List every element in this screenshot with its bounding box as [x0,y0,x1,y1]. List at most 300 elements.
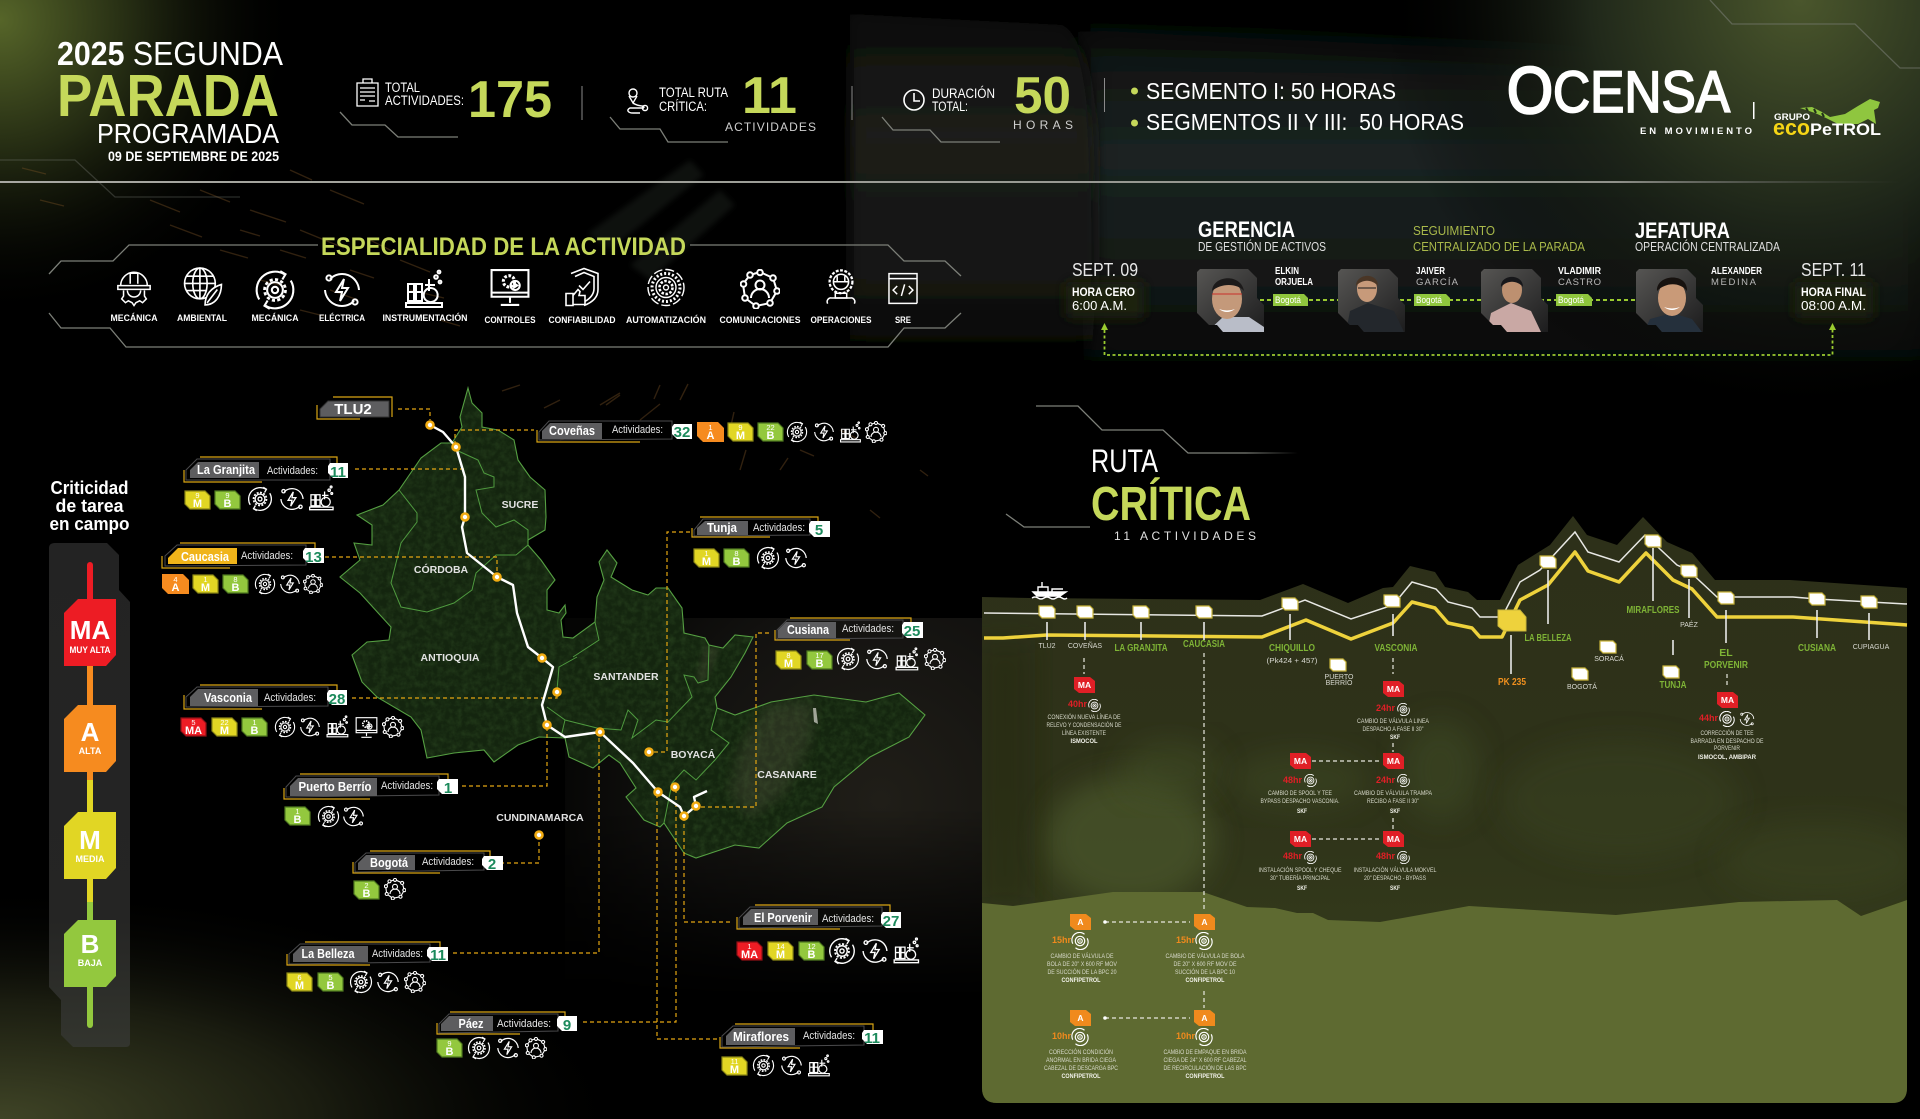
label: El Porvenir: 27 [883,913,899,930]
icon: sre: SRE [895,315,911,325]
pipeline nodes [426,422,700,838]
activity: conexion nueva linea [1046,677,1122,745]
label: La Belleza: B [327,980,335,992]
activity: instalacion spool y cheque [1258,831,1342,892]
icon: mecanica gear [252,271,299,323]
label: Miraflores: Actividades: [803,1030,855,1042]
activity: correccion de tee: BARRADA EN DESPACHO DE [1690,738,1764,745]
activity: instalacion valvula mokvel: INSTALACIÓN VÁLVULA MOKVEL [1354,865,1437,874]
activity: cambio de valvula de bola bpc 10: 15hr [1176,935,1196,945]
activity: instalacion spool y cheque: SKF [1297,885,1307,892]
activity: conexion nueva linea: LÍNEA EXISTENTE [1062,728,1107,737]
label: Cusiana [775,618,946,670]
logo: grupo ecopetrol [1773,99,1881,140]
level: baja: BAJA [78,958,103,968]
title: PARADA [57,63,279,129]
pipeline route [430,425,707,816]
stat: total actividades: ACTIVIDADES: [385,93,464,108]
label: La Belleza: 5 [328,973,333,982]
timeline start: sept 09: SEPT. 09 [1072,260,1138,280]
activity: cambio de valvula de bola bpc 10 [1166,914,1245,984]
label: La Belleza [287,942,448,993]
activity: cambio de empaque en brida: CONFIPETROL [1186,1073,1225,1080]
label: Miraflores: Miraflores [733,1029,789,1044]
label: Bogotá: 2 [364,881,369,890]
label: La Granjita: M [193,498,202,510]
level: media: MEDIA [76,854,105,864]
heading: ruta critica [1006,406,1298,543]
icon: ambiental: AMBIENTAL [177,313,227,323]
timeline end: sept 11: SEPT. 11 [1801,260,1866,280]
label: Miraflores: 11 [864,1030,880,1047]
heading: gerencia [1198,217,1326,254]
heading: ruta critica: CRÍTICA [1091,477,1251,531]
label: Puerto Berrío: B [294,814,302,826]
name: vladimir castro [1558,266,1602,288]
activity: cambio de empaque en brida: 10hr [1176,1031,1196,1041]
icon: automatizacion: AUTOMATIZACIÓN [626,314,706,325]
activity: cambio de valvula de bola bpc 20: CONFIPETROL [1062,977,1101,984]
icon: comunicaciones [720,270,800,325]
activity: cambio de spool y tee: SKF [1297,808,1307,815]
activity: correccion condicion anormal: CORECCIÓN CONDICIÓN [1049,1047,1113,1056]
icon: mecanica helmet [110,272,158,323]
level: media [64,812,116,879]
activity: correccion condicion anormal: ANORMAL EN BRIDA CIEGA [1046,1057,1117,1064]
stat: duracion total [882,67,1105,142]
activity: cambio de valvula de bola bpc 20: A [1077,917,1084,927]
activity: instalacion spool y cheque: 48hr [1283,851,1303,861]
activity: cambio de valvula linea [1357,681,1430,741]
stat: total ruta critica: TOTAL RUTA [659,85,728,100]
label: Cusiana: 25 [904,623,920,640]
arrow: dashed timeline loop [1101,323,1836,355]
activity: correccion de tee: PORVENIR [1714,745,1740,752]
label: Bogotá [353,851,503,900]
label: Tunja: 5 [815,522,823,539]
title [57,35,283,164]
label: Caucasia: 4 [173,575,178,584]
name: vladimir castro: VLADIMIR [1558,266,1602,277]
map labels: CUNDINAMARCA [496,812,584,824]
label: El Porvenir: 1 [747,942,752,951]
activity: instalacion spool y cheque: INSTALACIÓN SPOOL Y CHEQUE [1258,865,1342,874]
label: Vasconia: 28 [329,691,345,708]
activity: cambio de valvula linea: 24hr [1376,703,1396,713]
heading: criticidad [50,478,130,534]
station labels: PUERTO [1325,674,1354,681]
label: Tunja [692,517,830,569]
heading: gerencia: GERENCIA [1198,217,1295,242]
stat: duracion total: TOTAL: [932,99,968,114]
name: jaiver garcia: GARCÍA [1416,277,1459,288]
label: Puerto Berrío: Puerto Berrío [298,779,372,794]
photo: vladimir castro [1481,269,1549,332]
heading: criticidad: de tarea [56,496,124,516]
level: muy alta [64,599,116,666]
map labels: SANTANDER [593,671,659,683]
logo: grupo ecopetrol: PeTROL [1810,120,1881,139]
yellow pipeline line [984,552,1907,639]
label: Coveñas: B [767,430,775,442]
label: Caucasia: 1 [203,575,208,584]
activity: correccion condicion anormal: 10hr [1052,1031,1072,1041]
heading: gerencia: DE GESTIÓN DE ACTIVOS [1198,239,1326,254]
activity: cambio de valvula de bola bpc 20: 15hr [1052,935,1072,945]
label: La Granjita: La Granjita [197,462,256,477]
activity: correccion de tee: 44hr [1699,713,1719,723]
label: Coveñas [537,421,887,443]
activity: cambio de valvula de bola bpc 10: CONFIPETROL [1186,977,1225,984]
timeline end: sept 11: 08:00 A.M. [1801,299,1866,313]
station labels: VASCONIA [1374,642,1418,654]
icon: electrica [319,274,365,323]
activity: instalacion spool y cheque: 30" TUBERÍA PRINCIPAL [1270,873,1330,882]
station labels: CUPIAGUA [1853,644,1890,651]
label: El Porvenir [737,905,918,964]
tag: bogota 2: Bogotá [1416,295,1443,306]
icon: instrumentacion [382,271,468,323]
label: Vasconia: 1 [252,718,257,727]
map labels [414,499,817,824]
activity: cambio de spool y tee: CAMBIO DE SPOOL Y TEE [1268,790,1333,797]
level: muy alta: MUY ALTA [70,645,111,655]
label: Caucasia: Caucasia [181,549,230,564]
label: El Porvenir: MA [741,949,758,961]
activity: cambio de valvula linea: CAMBIO DE VÁLVULA LINEA [1357,716,1430,725]
stat: duracion total: 50 [1014,67,1071,125]
label: Coveñas: 9 [738,423,743,432]
station labels: PK 235 [1498,676,1526,688]
activity: cambio de empaque en brida: DE RECIRCULACIÓN DE LAS BPC [1164,1063,1247,1072]
icon: confiabilidad: CONFIABILIDAD [548,315,616,325]
label: Caucasia: 8 [233,575,238,584]
station labels: COVEÑAS [1068,641,1102,650]
label: Miraflores: 11 [731,1057,738,1066]
title: 09 DE SEPTIEMBRE DE 2025 [108,148,279,164]
terrain upper [975,516,1920,1103]
legend: criticidad de tarea en campo [49,478,130,1047]
map labels: CÓRDOBA [414,563,469,576]
activity: cambio de valvula de bola bpc 10: SUCCIÓN DE LA BPC 10 [1175,967,1235,976]
label: Vasconia: Actividades: [264,692,316,704]
station labels: PORVENIR [1704,659,1748,671]
station labels: TLU2 [1038,643,1056,650]
heading: seguimiento: CENTRALIZADO DE LA PARADA [1413,239,1585,254]
station labels: CUSIANA [1798,642,1836,654]
heading: jefatura [1635,218,1780,254]
label: La Belleza: Actividades: [372,948,423,960]
activity: cambio de empaque en brida: CAMBIO DE EMPAQUE EN BRIDA [1164,1049,1247,1056]
heading: criticidad: Criticidad [50,478,128,498]
photo: alexander medina [1636,269,1704,332]
map labels: BOYACÁ [671,748,716,761]
activity: correccion de tee: MA [1721,695,1734,705]
name: elkin orjuela: ELKIN [1275,266,1299,277]
stat: total actividades: TOTAL [385,80,420,95]
icon: electrica: ELÉCTRICA [319,313,365,323]
label: Coveñas: 32 [674,424,690,441]
label: Bogotá: B [363,888,371,900]
label: Tunja: Tunja [707,520,738,535]
label: Coveñas: Coveñas [549,423,595,438]
label: Tunja: 8 [734,549,739,558]
icon: ambiental [177,268,227,323]
timeline end: sept 11: HORA FINAL [1801,285,1866,299]
activity: conexion nueva linea: ISMOCOL [1070,738,1098,745]
label: Vasconia: 5 [191,718,196,727]
label: Cusiana: 8 [786,651,791,660]
label: Bogotá: 2 [488,856,496,873]
icon: comunicaciones: COMUNICACIONES [720,315,800,325]
label: Coveñas: A [707,430,715,442]
activity: cambio de empaque en brida: CIEGA DE 24" X 600 RF CABEZAL [1164,1057,1247,1064]
heading: criticidad: en campo [50,514,130,534]
icon: mecanica helmet: MECÁNICA [110,313,158,323]
label: Caucasia: 13 [305,549,322,566]
activity: cambio de spool y tee: BYPASS DESPACHO VASCONIA. [1260,798,1340,805]
activity: correccion condicion anormal: A [1077,1013,1084,1023]
label: Cusiana: M [784,658,793,670]
panel: ruta critica profile [975,516,1920,1103]
stations [1039,535,1877,680]
team: gerencia y jefatura [1066,217,1873,355]
label: Miraflores: M [730,1064,739,1076]
label: Vasconia: M [220,725,229,737]
level: alta: A [81,717,100,747]
label: Coveñas: 22 [766,423,775,432]
map base [340,388,925,858]
name: jaiver garcia: JAIVER [1416,266,1446,277]
label: El Porvenir: 14 [776,942,785,951]
label: Bogotá: Bogotá [370,855,409,870]
tag: bogota 3: Bogotá [1558,295,1585,306]
timeline start: sept 09: 6:00 A.M. [1072,299,1127,313]
label: El Porvenir: B [808,949,816,961]
activity: cambio de valvula trampa: MA [1387,756,1400,766]
panel: especialidad de la actividad [49,233,961,347]
level: alta: ALTA [79,746,102,756]
title: PROGRAMADA [97,118,279,149]
label: Caucasia: Actividades: [241,550,293,562]
label: Bogotá: Actividades: [422,856,474,868]
label: La Granjita: B [224,498,232,510]
segment durations [1131,78,1464,135]
station connectors [1047,548,1869,674]
name: elkin orjuela [1275,266,1313,288]
label: Vasconia: 22 [220,718,229,727]
heading: jefatura: OPERACIÓN CENTRALIZADA [1635,239,1780,254]
label: Cusiana: B [816,658,824,670]
label: Puerto Berrío [284,774,458,827]
activity: cambio de spool y tee [1260,753,1340,815]
label: TLU2: TLU2 [334,401,372,418]
activity: cambio de valvula de bola bpc 10: CAMBIO DE VÁLVULA DE BOLA [1166,951,1245,960]
level: baja [64,920,116,987]
label: Puerto Berrío: 1 [295,807,300,816]
station labels: PAÉZ [1680,620,1699,629]
timeline start: sept 09 [1066,260,1144,318]
label: Caucasia [162,543,324,594]
heading: ruta critica: RUTA [1091,443,1159,479]
activity: correccion de tee: CORRECCIÓN DE TEE [1700,728,1754,737]
activity: cambio de valvula de bola bpc 20: BOLA DE 20" X 600 RF MOV [1047,961,1118,968]
map labels: CASANARE [757,769,817,781]
name: alexander medina: ALEXANDER [1711,266,1763,277]
label: La Belleza: M [295,980,304,992]
label: Páez: B [446,1046,454,1058]
label: Tunja: Actividades: [753,522,805,534]
activity: cambio de empaque en brida [1164,1010,1247,1080]
label: La Granjita: 9 [195,491,200,500]
activity: conexion nueva linea: 40hr [1068,699,1088,709]
label: El Porvenir: El Porvenir [754,910,812,925]
label: Caucasia: B [232,582,240,594]
station labels: CAUCASIA [1183,638,1225,650]
icon: operaciones [810,270,872,325]
label: Tunja: B [733,556,741,568]
label: Tunja: 1 [704,549,709,558]
segment durations: SEGMENTOS II Y III: 50 HORAS [1146,109,1464,135]
label: Vasconia: B [251,725,259,737]
name: vladimir castro: CASTRO [1558,277,1601,288]
activity: instalacion valvula mokvel: 48hr [1376,851,1396,861]
activity: instalacion valvula mokvel: MA [1387,834,1400,844]
heading: seguimiento: SEGUIMIENTO [1413,223,1495,238]
map labels: ANTIOQUIA [421,652,480,664]
stat: duracion total: HORAS [1013,118,1073,132]
station labels: SORACÁ [1594,654,1624,663]
station labels: TUNJA [1660,679,1687,691]
heading: seguimiento [1413,223,1585,254]
icon: controles [484,270,536,325]
activity: instalacion valvula mokvel [1354,831,1437,892]
activity: cambio de spool y tee: MA [1294,756,1307,766]
logo: ocensa [1507,53,1754,137]
level: media: M [79,825,101,855]
stat: total actividades [340,71,582,137]
logo: grupo ecopetrol: GRUPO [1774,112,1810,123]
icon: confiabilidad [548,268,616,325]
name: elkin orjuela: ORJUELA [1275,277,1313,288]
activity: correccion condicion anormal: CONFIPETROL [1062,1073,1101,1080]
label: Miraflores [720,1024,883,1076]
heading: especialidad: ESPECIALIDAD DE LA ACTIVIDAD [321,233,686,261]
name: alexander medina [1711,266,1763,288]
label: La Granjita: Actividades: [267,465,318,477]
label: Caucasia: M [201,582,210,594]
label: La Belleza: 11 [430,947,446,964]
activity: instalacion valvula mokvel: SKF [1390,885,1400,892]
label: La Granjita [184,457,348,511]
activity: cambio de valvula trampa [1354,753,1433,815]
title: 2025 SEGUNDA [57,35,283,72]
label: La Granjita: 11 [330,464,346,481]
label: TLU2 [317,397,392,419]
activity: correccion condicion anormal [1044,1010,1118,1080]
stat: total ruta critica: ACTIVIDADES [725,120,816,134]
label: Vasconia: MA [185,725,202,737]
activity: cambio de valvula trampa: CAMBIO DE VÁLVULA TRAMPA [1354,788,1433,797]
stat: total ruta critica: CRÍTICA: [659,99,707,114]
icon: controles: CONTROLES [484,315,536,325]
heading: ruta critica: 11 ACTIVIDADES [1114,529,1256,543]
name: alexander medina: MEDINA [1711,277,1757,288]
tag: bogota 1: Bogotá [1275,295,1302,306]
label: Vasconia [181,685,404,738]
dashed connectors [1084,653,1727,1020]
station labels: LA GRANJITA [1114,642,1168,654]
logo: ocensa: EN MOVIMIENTO [1640,126,1752,137]
white pipeline line [984,532,1907,619]
timeline end: sept 11 [1795,260,1873,318]
activity: cambio de spool y tee: 48hr [1283,775,1303,785]
label: Páez: Páez [458,1016,484,1031]
stat: duracion total: DURACIÓN [932,86,995,101]
activity: correccion de tee [1690,692,1764,761]
activity: conexion nueva linea: RELEVO Y CONDENSACIÓN DE [1046,720,1122,729]
photo: elkin orjuela [1197,269,1265,332]
activity: cambio de valvula de bola bpc 20: CAMBIO DE VÁLVULA DE [1050,951,1114,960]
activity: cambio de empaque en brida: A [1201,1013,1208,1023]
icon: instrumentacion: INSTRUMENTACIÓN [382,312,468,323]
activity: instalacion valvula mokvel: 20" DESPACHO - BYPASS [1364,875,1427,882]
label: Cusiana: Actividades: [842,623,894,635]
label: Cusiana: 17 [815,651,824,660]
label: La Belleza: La Belleza [302,946,355,961]
timeline start: sept 09: HORA CERO [1072,285,1135,299]
station labels: BOGOTÁ [1567,682,1597,691]
label: Vasconia: Vasconia [204,690,253,705]
label: Coveñas: Actividades: [612,424,663,436]
activity: cambio de valvula trampa: RECIBO A FASE II 30" [1367,798,1420,805]
station labels: LA BELLEZA [1524,632,1572,644]
stat: total actividades: 175 [468,71,552,129]
level: muy alta: MA [70,615,110,645]
activity: cambio de valvula de bola bpc 10: A [1201,917,1208,927]
icon: sre [889,274,917,325]
label: Cusiana: Cusiana [787,622,830,637]
label: Páez: 9 [447,1039,452,1048]
map: colombia route [162,388,946,1076]
activity: correccion de tee: ISMOCOL, AMBIPAR [1698,754,1756,761]
label: El Porvenir: M [776,949,785,961]
activity: cambio de valvula linea: MA [1387,684,1400,694]
activity: conexion nueva linea: CONEXIÓN NUEVA LÍNEA DE [1048,712,1121,721]
station labels: (Pk424 + 457) [1266,658,1318,665]
activity: cambio de valvula de bola bpc 10: DE 20" X 600 RF MOV DE [1174,961,1237,968]
icon: ship [1032,582,1067,599]
label: Caucasia: A [172,582,180,594]
logo: grupo ecopetrol: eco [1773,115,1810,140]
activity: cambio de valvula de bola bpc 20 [1047,914,1118,984]
activity: cambio de valvula de bola bpc 20: DE SUCCIÓN DE LA BPC 20 [1048,967,1117,976]
label: Coveñas: M [736,430,745,442]
activity: cambio de valvula trampa: 24hr [1376,775,1396,785]
terrain lower [982,892,1907,1103]
station labels: EL [1719,647,1733,659]
activity: instalacion spool y cheque: MA [1294,834,1307,844]
icon: automatizacion [626,270,706,325]
station labels: BERRÍO [1326,678,1353,687]
leader lines [325,409,769,1039]
stat: total ruta critica [610,67,852,142]
activity: correccion condicion anormal: CABEZAL DE DESCARGA BPC [1044,1065,1118,1072]
label: La Belleza: 6 [297,973,302,982]
station labels [1038,604,1890,691]
name: jaiver garcia [1416,266,1459,288]
label: Páez: 9 [563,1017,571,1034]
